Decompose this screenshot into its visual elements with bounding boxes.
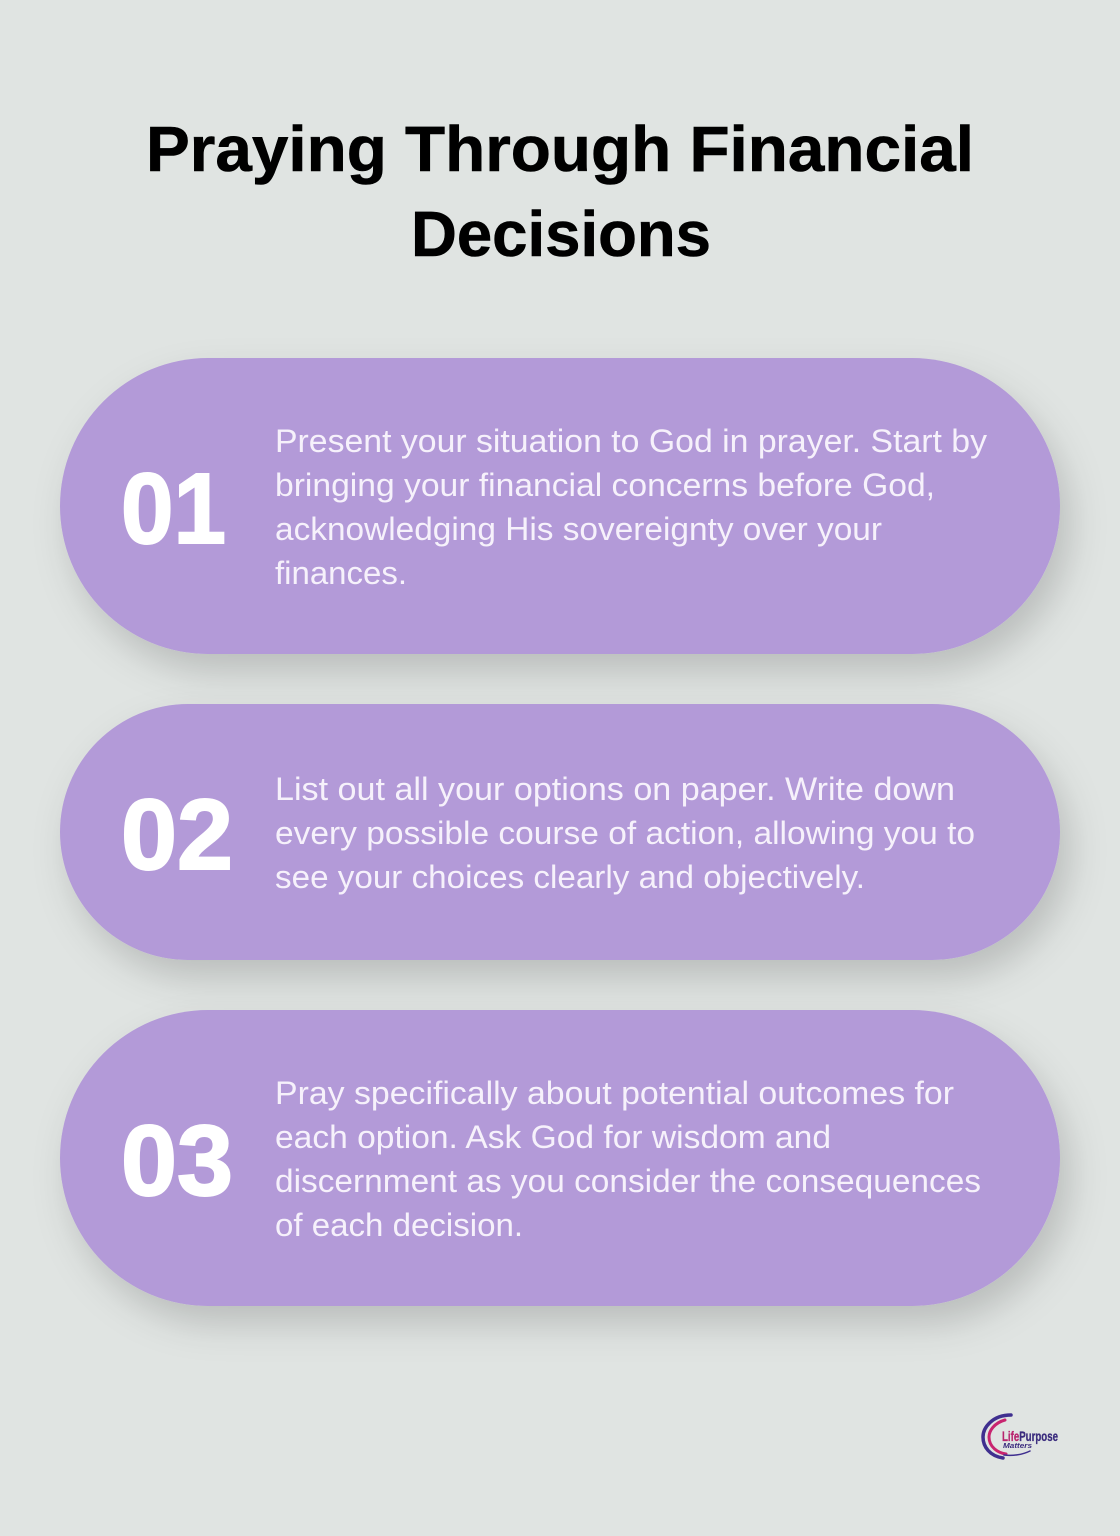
logo wordmark: LifePurpose xyxy=(1002,1428,1058,1444)
text: step 03 description: Pray specifically about potential outcomes for xyxy=(275,1075,954,1111)
text: step 01 description: bringing your financial concerns before God, xyxy=(275,467,935,503)
title: Praying Through Financial xyxy=(146,113,974,185)
logo tagline: Matters xyxy=(1003,1443,1032,1450)
text: step 02 description: List out all your options on paper. Write down xyxy=(275,771,955,807)
text: step 01 description xyxy=(275,423,987,591)
text: step 03 description: discernment as you consider the consequences xyxy=(275,1163,981,1199)
panel: step 03 xyxy=(60,1010,1060,1306)
logo arcs xyxy=(983,1415,1030,1458)
text: step 03 description: each option. Ask God for wisdom and xyxy=(275,1119,831,1155)
text: step 03 description xyxy=(275,1075,981,1243)
text: step 02 description: see your choices clearly and objectively. xyxy=(275,859,865,895)
icon: Life Purpose Matters logo xyxy=(983,1415,1058,1458)
panel: step 01 xyxy=(60,358,1060,654)
text: step 02 description: every possible course of action, allowing you to xyxy=(275,815,975,851)
text: step 01 description: finances. xyxy=(275,555,407,591)
title: Decisions xyxy=(411,198,711,270)
pill background 01 xyxy=(60,358,1060,654)
panel: step 02 xyxy=(60,704,1060,960)
text: step 02 description xyxy=(275,771,975,895)
number 02: 02 xyxy=(121,779,233,891)
pill background 02 xyxy=(60,704,1060,960)
text: step 01 description: acknowledging His sovereignty over your xyxy=(275,511,882,547)
text: step 03 description: of each decision. xyxy=(275,1207,523,1243)
number 01: 01 xyxy=(121,453,226,565)
number 03: 03 xyxy=(121,1105,233,1217)
pill background 03 xyxy=(60,1010,1060,1306)
title xyxy=(146,113,974,270)
text: step 01 description: Present your situation to God in prayer. Start by xyxy=(275,423,987,459)
